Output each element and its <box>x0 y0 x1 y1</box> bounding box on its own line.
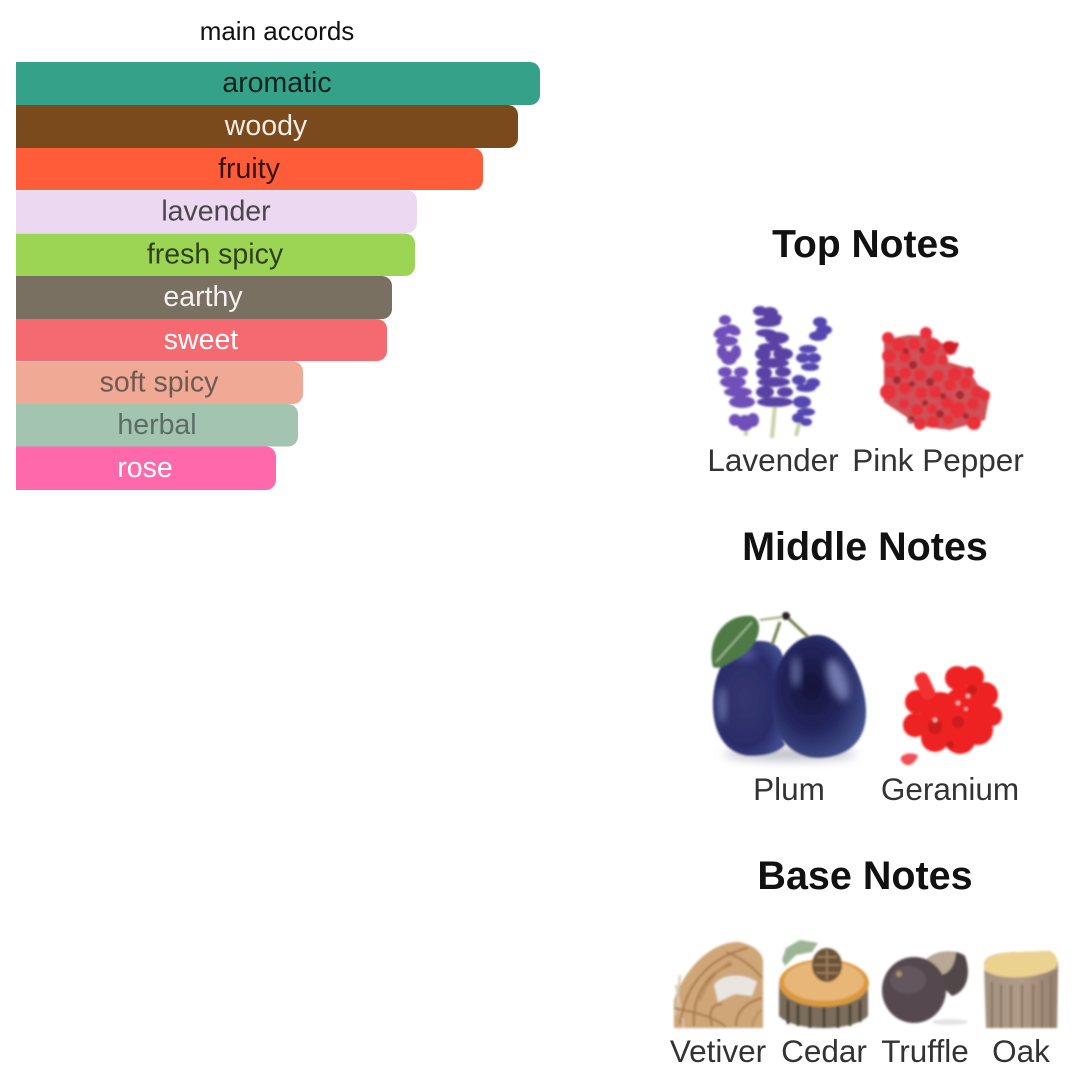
bar: woody <box>16 105 518 148</box>
bar: lavender <box>16 190 417 233</box>
bar: soft spicy <box>16 362 303 404</box>
label: Cedar: Cedar <box>781 1033 867 1069</box>
bar: earthy <box>16 276 392 319</box>
icon: pink pepper <box>880 327 990 430</box>
bar: rose: rose <box>117 452 173 484</box>
bar: lavender: lavender <box>161 196 271 228</box>
bar: soft spicy: soft spicy <box>100 366 219 398</box>
icon: cedar <box>779 940 869 1028</box>
chart title: main accords <box>200 16 354 46</box>
bar: herbal <box>16 404 298 446</box>
bar: aromatic: aromatic <box>222 67 332 99</box>
icon: geranium <box>901 666 1002 765</box>
bar: fruity <box>16 148 483 190</box>
bar: fruity: fruity <box>218 153 281 185</box>
label: Geranium: Geranium <box>881 771 1019 807</box>
label: Oak: Oak <box>992 1033 1050 1069</box>
bar: sweet <box>16 319 387 361</box>
bar: earthy: earthy <box>163 281 243 313</box>
bar: fresh spicy <box>16 234 415 276</box>
bar: herbal: herbal <box>117 409 197 441</box>
heading: Base Notes: Base Notes <box>757 854 973 898</box>
label: Plum: Plum <box>753 771 825 807</box>
bar: rose <box>16 446 276 490</box>
label: Lavender: Lavender <box>707 442 839 478</box>
icon: vetiver <box>674 942 763 1028</box>
icon: oak <box>984 951 1058 1028</box>
heading: Top Notes: Top Notes <box>772 223 960 266</box>
label: Pink Pepper: Pink Pepper <box>852 442 1024 478</box>
label: Truffle: Truffle <box>881 1033 969 1069</box>
label: Vetiver: Vetiver <box>670 1033 766 1069</box>
icon: plum <box>712 612 866 760</box>
bar: sweet: sweet <box>164 324 238 356</box>
bar: woody: woody <box>224 110 308 142</box>
bar: aromatic <box>16 62 540 105</box>
icon: truffle <box>882 951 968 1025</box>
bar chart: main accords <box>16 62 540 490</box>
heading: Middle Notes: Middle Notes <box>742 525 988 569</box>
bar: fresh spicy: fresh spicy <box>147 238 284 270</box>
icon: lavender <box>712 306 832 438</box>
